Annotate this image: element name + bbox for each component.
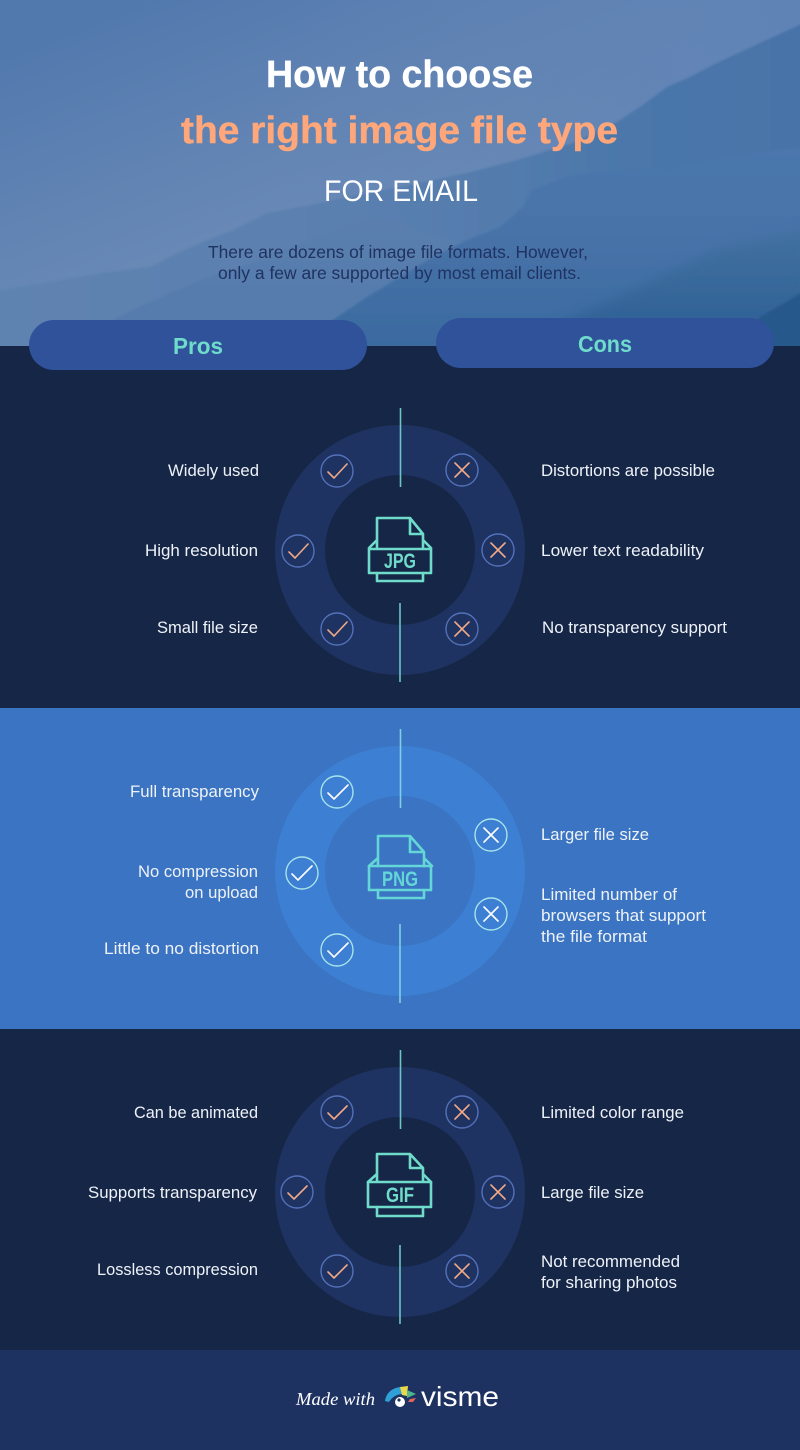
PNG pros text: on upload (185, 884, 258, 902)
GIF pros text: Can be animated (134, 1104, 258, 1122)
JPG pros text: Widely used (168, 462, 259, 480)
PNG pros text: No compression (138, 863, 258, 881)
GIF cons text: for sharing photos (541, 1274, 677, 1292)
footer (0, 1350, 800, 1450)
subtitle: for email: FOR EMAIL (324, 175, 478, 208)
GIF diagram (275, 1050, 525, 1324)
made with text: Made with (295, 1389, 375, 1409)
icon: GIF file: GIF (386, 1184, 414, 1207)
cons pill: Cons (578, 331, 632, 357)
JPG cons text (541, 462, 727, 637)
pro checks (281, 1096, 353, 1287)
PNG cons text (541, 826, 706, 946)
intro text: only a few are supported by most email clients. (218, 263, 581, 283)
con crosses (446, 1096, 514, 1287)
blue panel: PNG (0, 708, 800, 1029)
pros pill (29, 320, 367, 370)
con crosses (446, 454, 514, 645)
dark panel: GIF (0, 1029, 800, 1350)
icon: GIF file (368, 1154, 431, 1216)
cons pill (436, 318, 774, 368)
icon: visme logo (385, 1386, 416, 1407)
GIF cons text (541, 1104, 684, 1292)
JPG pros text (145, 462, 259, 637)
intro text: There are dozens of image file formats. However, (208, 242, 588, 262)
PNG cons text: the file format (541, 928, 647, 946)
pros pill: Pros (173, 333, 223, 359)
pro checks (282, 455, 353, 645)
icon: PNG file: PNG (382, 868, 418, 891)
JPG diagram (275, 408, 525, 682)
PNG cons text: Larger file size (541, 826, 649, 844)
GIF pros text: Supports transparency (88, 1184, 258, 1202)
GIF pros text (88, 1104, 258, 1279)
PNG pros text (104, 783, 260, 958)
intro text (208, 242, 588, 283)
PNG pros text: Full transparency (130, 783, 260, 801)
GIF cons text: Large file size (541, 1184, 644, 1202)
icon: JPG file: JPG (384, 550, 416, 573)
PNG cons text: browsers that support (541, 907, 706, 925)
con crosses (475, 819, 507, 930)
icon: PNG file (369, 836, 432, 898)
GIF cons text: Limited color range (541, 1104, 684, 1122)
GIF cons text: Not recommended (541, 1253, 680, 1271)
GIF pros text: Lossless compression (97, 1261, 258, 1279)
PNG pros text: Little to no distortion (104, 940, 259, 958)
header background with mountains (0, 0, 800, 360)
visme wordmark: visme (421, 1381, 499, 1412)
PNG cons text: Limited number of (541, 886, 677, 904)
icon: JPG file (369, 518, 431, 581)
pro checks (286, 776, 353, 966)
title: the right image file type (181, 110, 618, 152)
JPG cons text: No transparency support (542, 619, 727, 637)
JPG pros text: Small file size (157, 619, 258, 637)
JPG cons text: Distortions are possible (541, 462, 715, 480)
title: How to choose (266, 54, 533, 96)
PNG diagram (275, 729, 525, 1003)
dark panel: JPG (0, 346, 800, 708)
JPG pros text: High resolution (145, 542, 258, 560)
title (181, 54, 618, 152)
JPG cons text: Lower text readability (541, 542, 705, 560)
